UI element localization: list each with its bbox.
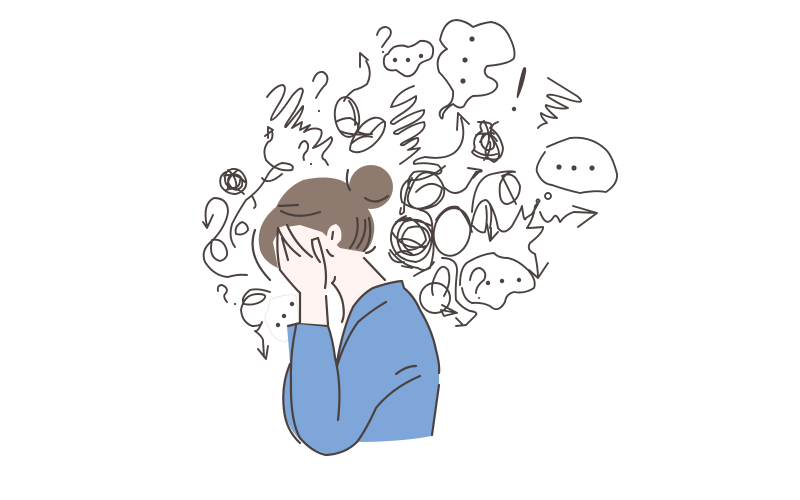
knot scribble left <box>220 169 246 194</box>
speech bubble: right <box>536 138 617 202</box>
wiggly arrow right <box>540 206 597 227</box>
doodle lower left with arrow <box>241 289 270 359</box>
curved arrow left <box>203 198 247 277</box>
zigzag scribble right <box>538 78 581 128</box>
exclamation mark <box>512 67 526 111</box>
loops and arrow lower centre <box>420 258 476 326</box>
hands <box>277 225 344 325</box>
wiggly arrow down right <box>527 227 548 278</box>
speech bubble: large top <box>438 20 514 119</box>
spring scribble left <box>267 85 332 165</box>
hair <box>259 178 374 268</box>
doodles: swirling thoughts <box>203 20 617 359</box>
hair strands <box>253 205 385 280</box>
speech bubble: lower right <box>460 253 535 309</box>
curved arrow to large bubble <box>408 113 469 190</box>
knot scribble top right <box>472 121 503 162</box>
woman <box>253 165 439 455</box>
speech bubble: small top <box>384 41 433 76</box>
coil scribble centre <box>391 86 425 164</box>
speech bubble: behind hand <box>265 295 300 342</box>
arrow with tangled loops top centre <box>332 53 385 152</box>
ear <box>327 224 341 248</box>
sweater body <box>283 281 439 455</box>
question marks <box>218 27 391 305</box>
wavy arrow up left <box>231 127 293 247</box>
wavy line and arrow down centre right <box>445 168 538 241</box>
hair bun <box>347 165 393 209</box>
tangled ball scribble <box>389 166 475 276</box>
neck and face skin <box>275 225 386 330</box>
